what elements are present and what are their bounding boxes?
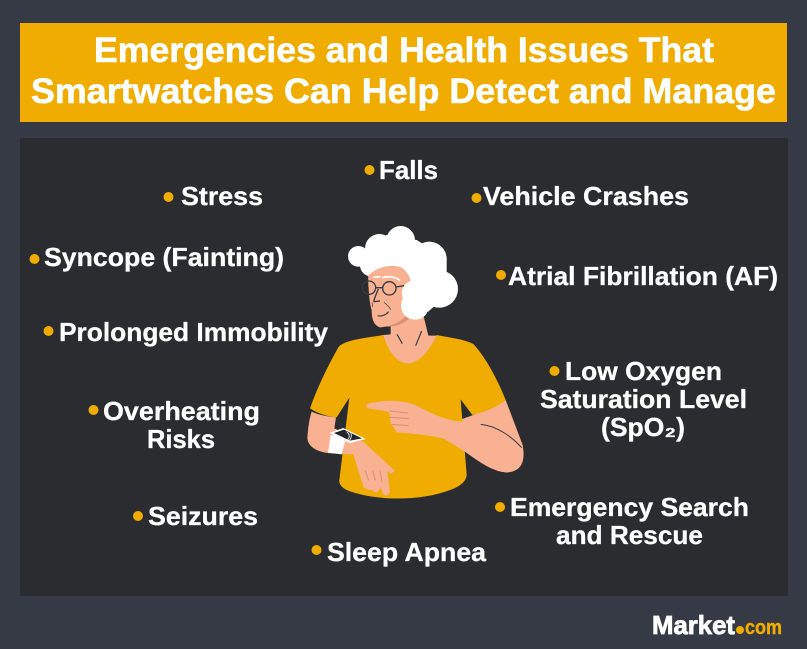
label: Syncope (Fainting): Syncope (Fainting) [44,242,284,272]
pointing hand over shirt [366,401,523,472]
label: Sleep Apnea: Sleep Apnea [327,537,487,567]
logo: Market.com: Market [652,610,735,640]
label: Emergency Search and Rescue [495,492,749,550]
label: Overheating Risks: Overheating [103,396,260,426]
label: Overheating Risks: Risks [147,424,215,454]
label: Vehicle Crashes: Vehicle Crashes [483,181,689,211]
title text: Emergencies and Health Issues That [94,31,714,70]
right arm and pointing hand [366,400,524,472]
label: Overheating Risks [88,396,260,454]
left forearm and hand [307,412,395,495]
finger and arm crease lines [365,411,408,482]
face [368,266,415,327]
label: Low Oxygen Saturation Level (SpO2): Saturation Level [540,384,747,414]
neck lines [397,331,422,346]
label: Emergency Search and Rescue: and Rescue [556,520,703,550]
label: Seizures: Seizures [148,501,258,531]
title text [31,31,776,111]
title text: Smartwatches Can Help Detect and Manage [31,72,776,111]
logo: Market.com [652,610,782,640]
neck [383,315,437,363]
shirt [310,335,506,498]
illustration: elderly woman checking smartwatch [307,226,524,498]
label: Low Oxygen Saturation Level (SpO2): (SpO₂) [601,412,685,442]
label: Atrial Fibrillation (AF): Atrial Fibrillation (AF) [508,261,778,291]
smartwatch [328,428,366,454]
hair [348,226,458,320]
logo: Market.com: com [745,617,782,639]
label: Falls: Falls [379,155,438,185]
label: Low Oxygen Saturation Level (SpO2) [540,356,747,442]
glasses, nose and mouth [362,281,404,316]
label: Low Oxygen Saturation Level (SpO2): Low Oxygen [565,356,722,386]
label: Prolonged Immobility: Prolonged Immobility [59,317,329,347]
face top over hair [368,266,411,295]
title banner [20,23,787,122]
label: Stress: Stress [181,181,263,211]
eyebrows [374,277,399,280]
panel: dark background [20,138,788,596]
label: Emergency Search and Rescue: Emergency Search [510,492,749,522]
